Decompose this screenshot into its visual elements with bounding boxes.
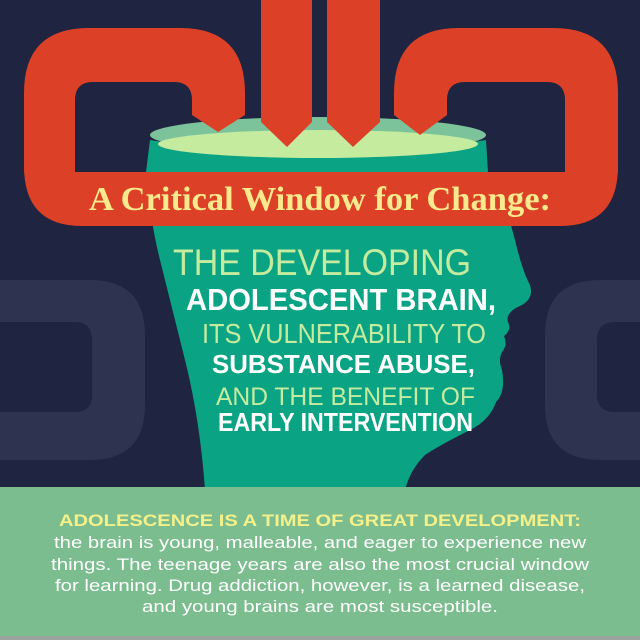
right link	[394, 28, 618, 172]
arrow bar 1	[261, 0, 312, 147]
bottom band	[24, 166, 618, 226]
subtitle block: AND THE BENEFIT OF	[216, 383, 475, 411]
bottom panel: for learning. Drug addiction, however, is a learned disease,	[55, 576, 585, 595]
subtitle block: THE DEVELOPING	[173, 242, 471, 283]
subtitle block	[173, 242, 496, 437]
head silhouette	[146, 117, 531, 490]
arrow bar 2	[327, 0, 380, 147]
subtitle block: ITS VULNERABILITY TO	[202, 318, 486, 349]
bottom panel	[0, 487, 640, 640]
left link	[24, 28, 245, 172]
ghost link left	[0, 280, 145, 460]
ghost link right	[545, 280, 640, 460]
red chain with arrows	[24, 0, 618, 226]
bottom panel: the brain is young, malleable, and eager to experience new	[54, 533, 587, 552]
bottom panel: ADOLESCENCE IS A TIME OF GREAT DEVELOPMENT:	[59, 511, 581, 530]
subtitle block: ADOLESCENT BRAIN,	[186, 282, 496, 317]
subtitle block: SUBSTANCE ABUSE,	[212, 349, 475, 379]
bottom panel: and young brains are most susceptible.	[142, 597, 498, 616]
title: A Critical Window for Change:	[89, 181, 551, 218]
subtitle block: EARLY INTERVENTION	[218, 407, 473, 437]
bottom panel: things. The teenage years are also the most crucial window	[51, 555, 590, 574]
